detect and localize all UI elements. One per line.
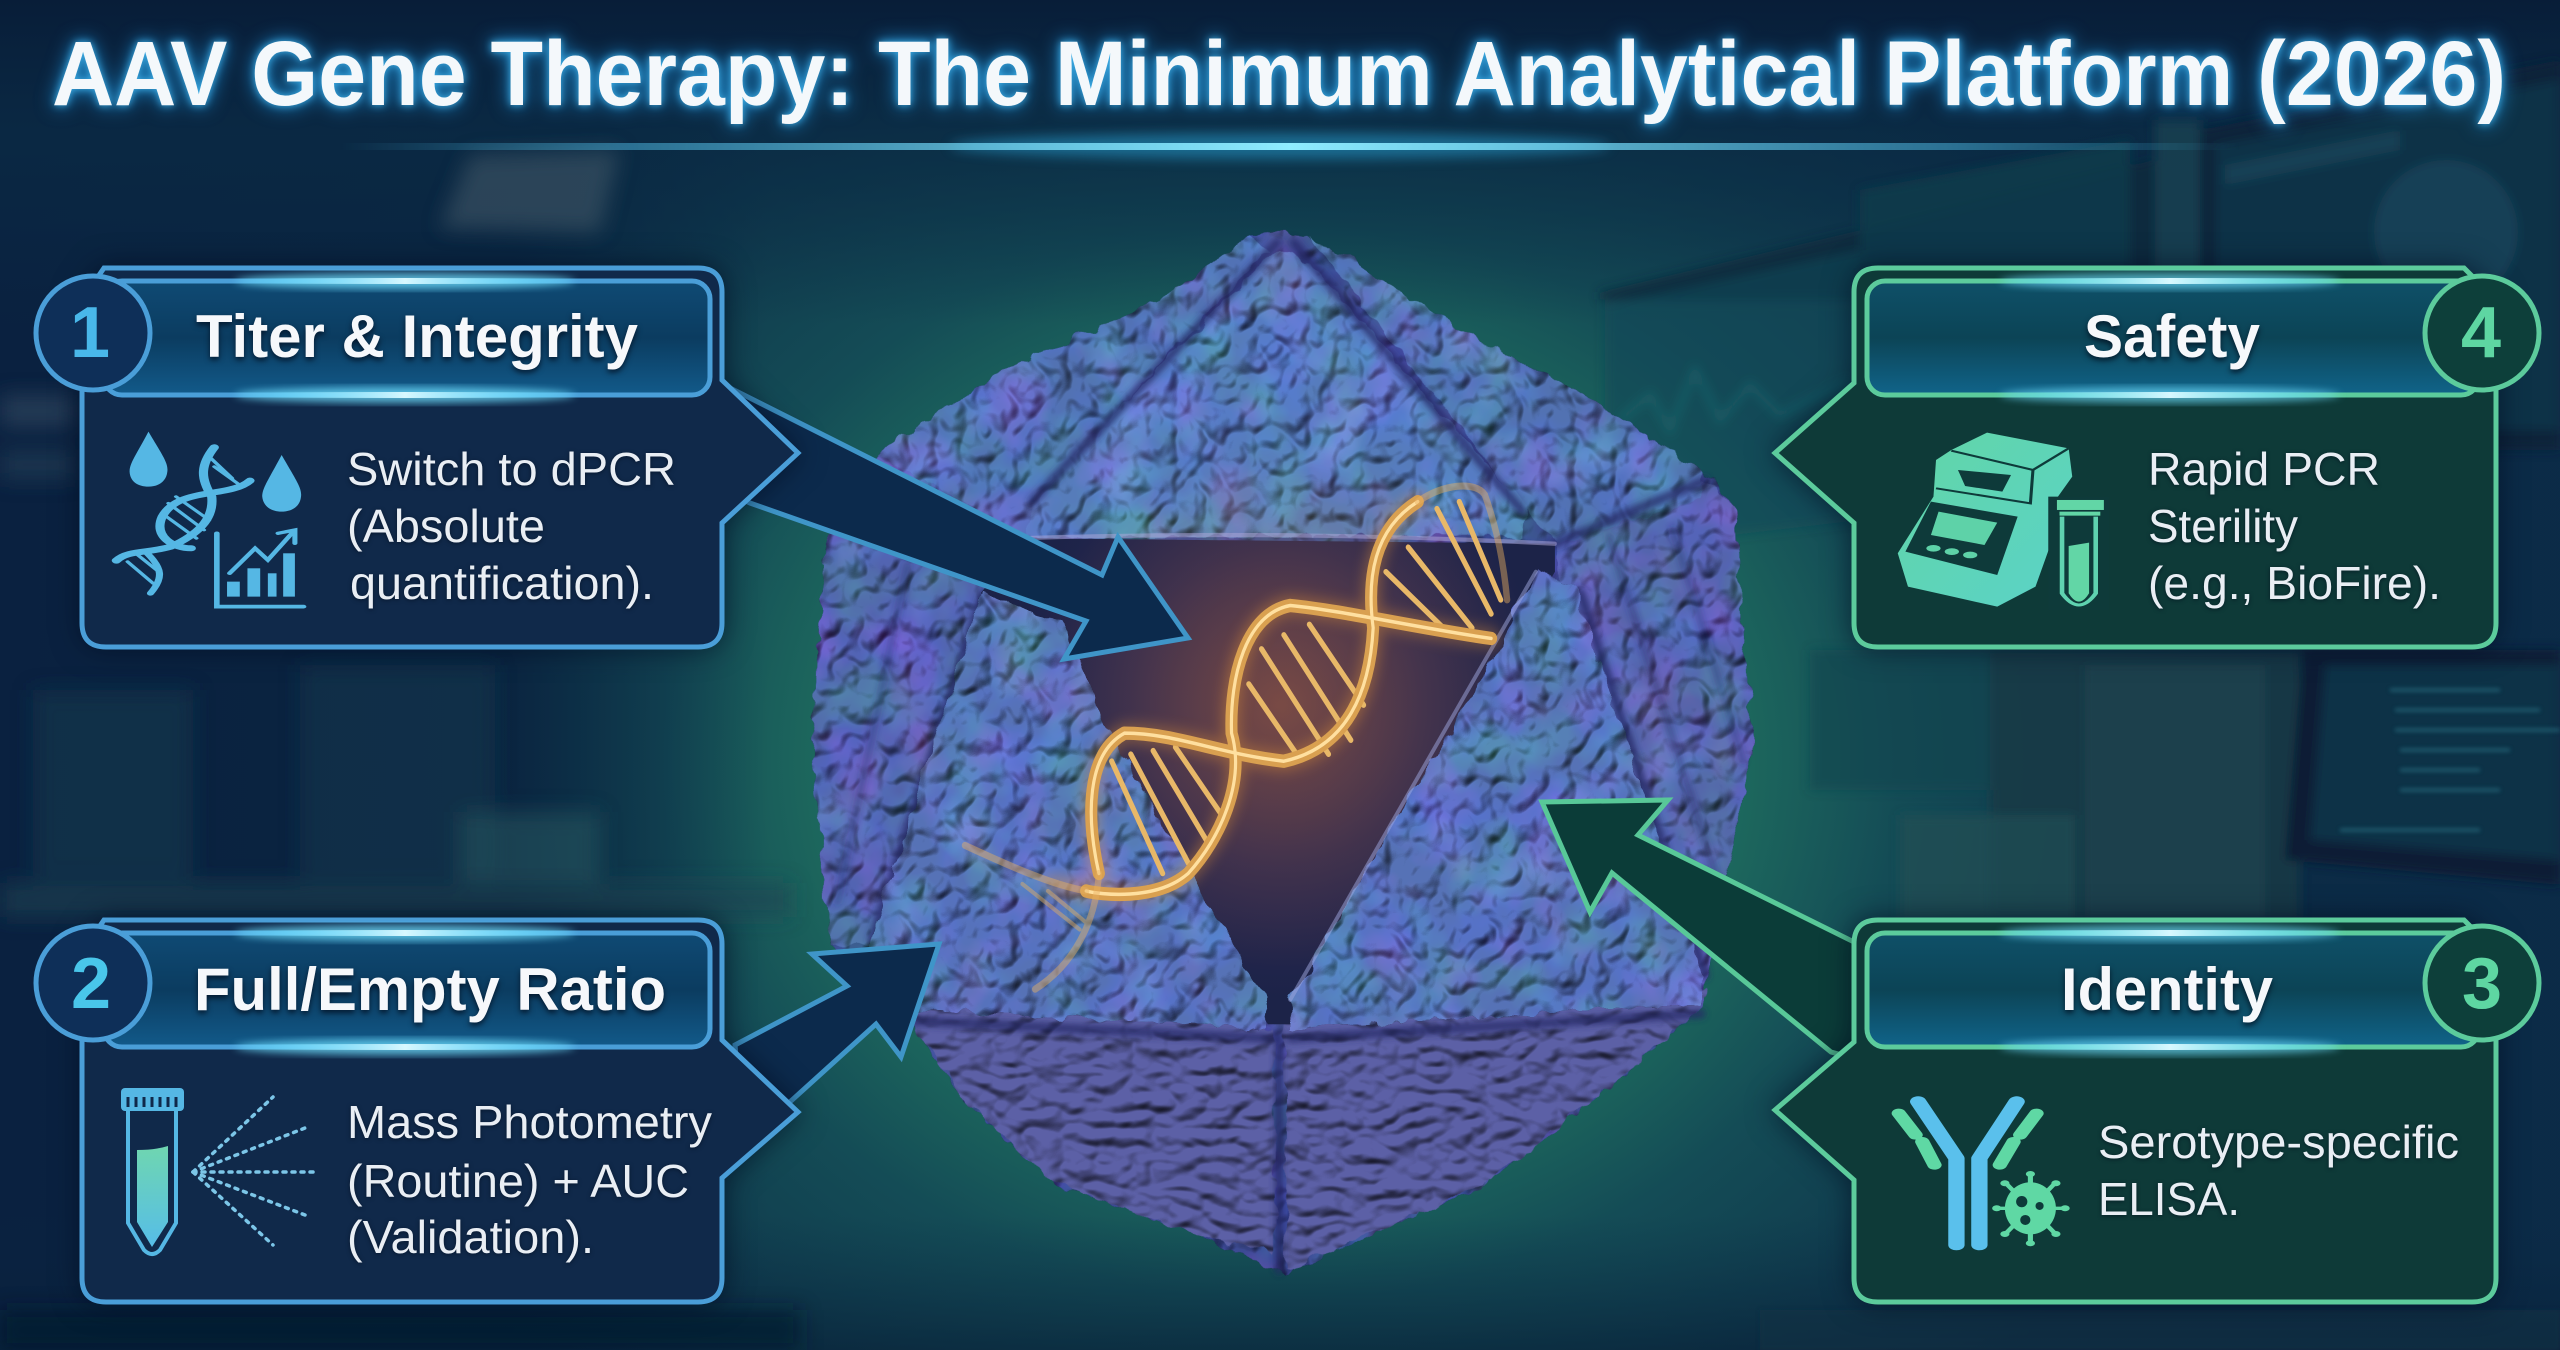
DNA rungs [1112, 502, 1501, 873]
panel 3 text [2098, 1116, 2459, 1225]
warm glow behind DNA [1029, 439, 1539, 972]
panel 1 text: quantification). [350, 557, 654, 609]
panel 3 text: Serotype-specific [2098, 1116, 2459, 1168]
capsid shell facets [812, 232, 1753, 1273]
title underline glow [340, 133, 2240, 159]
panel 4 text: Sterility [2148, 500, 2298, 552]
number badge 1 [36, 276, 150, 390]
panel 1 body [82, 268, 798, 647]
panel 2 header [104, 925, 710, 1055]
panel 4 heading: Safety [2084, 303, 2261, 370]
panel 2 text [347, 1096, 712, 1263]
number badge 4 [2425, 276, 2539, 390]
panel 2: full/empty ratio [36, 920, 798, 1302]
panel 1: titer and integrity [36, 268, 798, 647]
panel 3 header [1867, 925, 2479, 1055]
arrow 1 into capsid [722, 384, 1188, 659]
number badge 4: 4 [2461, 293, 2501, 373]
panel 4 body [1775, 268, 2496, 647]
number badge 3: 3 [2462, 944, 2502, 1024]
DNA strands [1086, 502, 1491, 894]
capsid lower facets [869, 937, 1705, 1270]
panel 4 text: (e.g., BioFire). [2148, 557, 2441, 609]
panel 1 text: (Absolute [347, 500, 545, 552]
icon: sample tube with scattered rays [121, 1088, 314, 1254]
capsid flaps [869, 568, 1705, 1028]
DNA glow [1054, 502, 1491, 893]
panel 4 text [2148, 443, 2441, 609]
panel 1 text [347, 443, 676, 609]
panel 2 body [82, 920, 798, 1302]
capsid facet creases [837, 242, 1743, 1270]
DNA faded ends [965, 486, 1507, 989]
central capsid illustration [812, 232, 1753, 1273]
panel 1 header [104, 273, 710, 403]
arrow 2 into capsid [735, 944, 939, 1120]
panel 2 text: (Routine) + AUC [347, 1155, 689, 1207]
number badge 2: 2 [71, 944, 111, 1024]
panel 4 text: Rapid PCR [2148, 443, 2380, 495]
number badge 1: 1 [70, 293, 110, 373]
icon: antibody and virus [1899, 1102, 2070, 1246]
panel 3 text: ELISA. [2098, 1173, 2240, 1225]
panel 4: safety [1775, 268, 2539, 647]
glowing DNA helix [965, 486, 1507, 989]
panel 3 heading: Identity [2061, 956, 2274, 1023]
icon: droplets, DNA and chart [116, 432, 304, 607]
arrow 3 into capsid [1542, 800, 1860, 1060]
icon: rapid PCR machine and tube [1898, 433, 2109, 610]
panel 1 heading: Titer & Integrity [196, 303, 639, 370]
capsid opening [981, 538, 1555, 1024]
panel 2 heading: Full/Empty Ratio [194, 956, 666, 1023]
panel 3: identity [1775, 920, 2539, 1302]
number badge 2 [36, 926, 150, 1040]
panel 2 text: (Validation). [347, 1211, 594, 1263]
number badge 3 [2425, 926, 2539, 1040]
panel 4 header [1867, 273, 2479, 403]
capsid rim highlights [1026, 535, 1555, 1000]
panel 3 body [1775, 920, 2496, 1302]
panel 2 text: Mass Photometry [347, 1096, 712, 1148]
panel 1 text: Switch to dPCR [347, 443, 676, 495]
